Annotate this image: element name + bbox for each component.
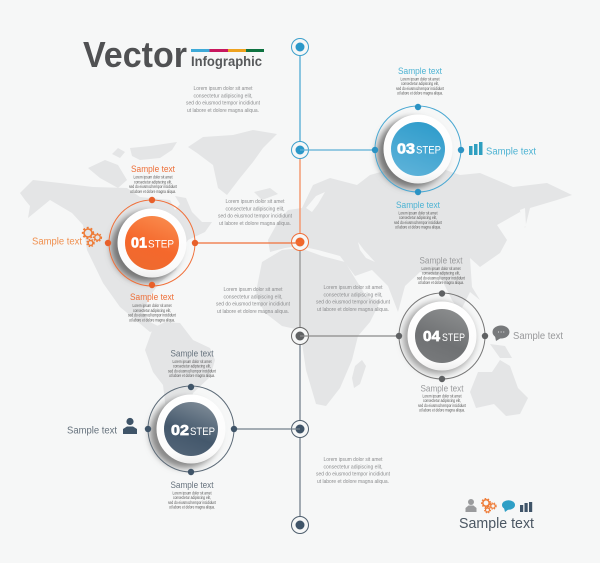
step 04: [300, 256, 563, 413]
bottom icon row: [459, 499, 534, 532]
step 02: [67, 348, 300, 510]
step 04 side label: Sample text: [513, 331, 563, 342]
step 01: [32, 164, 300, 322]
text block: middle left lower: ut labore et dolore magna aliqua.: [217, 309, 289, 315]
step 01 bottom label: [128, 292, 177, 322]
text block: top: [186, 86, 260, 114]
step 01 top label: sed do eiusmod tempor incididunt: [129, 184, 178, 189]
step 04 bottom label: Lorem ipsum dolor sit amet: [422, 394, 462, 398]
step 01 top label: Sample text: [131, 164, 175, 174]
icon: bar chart: [469, 142, 482, 155]
text block: middle left upper: [218, 199, 292, 227]
text block: top: sed do eiusmod tempor incididunt: [186, 101, 260, 107]
text block: middle left lower: consectetur adipiscing elit,: [224, 294, 283, 300]
text block: middle left upper: ut labore et dolore magna aliqua.: [219, 221, 291, 227]
step 03 bottom label: ut labore et dolore magna aliqua.: [395, 225, 441, 230]
text block: middle right: consectetur adipiscing elit,: [324, 292, 383, 298]
step 02 top label: Sample text: [170, 348, 214, 358]
step 03 top label: sed do eiusmod tempor incididunt: [396, 86, 445, 91]
step 03 bottom label: [394, 200, 443, 230]
text block: middle right: [316, 285, 390, 313]
step 02 side label: Sample text: [67, 426, 117, 436]
step 02 bottom label: sed do eiusmod tempor incididunt: [168, 500, 217, 505]
step 04 bottom label: Sample text: [420, 384, 464, 394]
step 04 top label: ut labore et dolore magna aliqua.: [418, 280, 464, 285]
icon: gears small: [482, 499, 496, 513]
step 04 top label: Lorem ipsum dolor sit amet: [422, 266, 461, 271]
step 02 top label: sed do eiusmod tempor incididunt: [168, 368, 217, 373]
step 04 top label: consectetur adipiscing elit,: [422, 271, 460, 276]
step 04 bottom label: sed do eiusmod tempor incididunt: [418, 403, 467, 408]
step 02 top label: Lorem ipsum dolor sit amet: [172, 359, 212, 364]
step 01 side label: Sample text: [32, 236, 82, 248]
text block: middle left lower: [216, 287, 290, 315]
step 02: STEP: [190, 426, 215, 438]
step 04: STEP: [442, 332, 465, 344]
step 04 top label: [417, 256, 466, 285]
vertical timeline: [299, 47, 301, 525]
step 01: STEP: [148, 238, 174, 250]
title: Infographic: [191, 54, 262, 69]
timeline nodes: [292, 38, 308, 534]
text block: middle left upper: Lorem ipsum dolor sit amet: [226, 199, 285, 205]
step 01 bottom label: consectetur adipiscing elit,: [133, 308, 171, 313]
title: Vector: [83, 34, 187, 75]
text block: middle right: ut labore et dolore magna aliqua.: [317, 307, 389, 313]
step 04 bottom label: [418, 384, 467, 413]
step 02 top label: consectetur adipiscing elit,: [173, 364, 211, 369]
step 04 bottom label: ut labore et dolore magna aliqua.: [419, 408, 465, 413]
step 04 top label: Sample text: [420, 256, 463, 266]
text block: bottom: consectetur adipiscing elit,: [324, 464, 383, 470]
step 02: 02: [171, 422, 189, 439]
step 02 top label: ut labore et dolore magna aliqua.: [169, 373, 215, 378]
step 04 top label: sed do eiusmod tempor incididunt: [417, 275, 466, 280]
step 03 bottom label: consectetur adipiscing elit,: [399, 215, 437, 220]
step 03: 03: [397, 140, 415, 158]
text block: bottom: Lorem ipsum dolor sit amet: [324, 457, 383, 463]
icon: person: [123, 418, 137, 434]
step 01 top label: [129, 164, 178, 194]
step 03 top label: Lorem ipsum dolor sit amet: [400, 76, 440, 82]
step 03 top label: Sample text: [398, 66, 442, 76]
icon: person small: [466, 499, 476, 512]
step 01: 01: [131, 234, 147, 252]
step 03 side label: Sample text: [486, 146, 536, 158]
step 04: 04: [423, 328, 441, 345]
text block: top: consectetur adipiscing elit,: [194, 93, 253, 99]
step 01 top label: Lorem ipsum dolor sit amet: [134, 174, 173, 180]
step 03 top label: consectetur adipiscing elit,: [401, 81, 439, 86]
text block: top: ut labore et dolore magna aliqua.: [187, 108, 259, 114]
icon: bar chart small: [520, 502, 532, 512]
text block: bottom: [316, 457, 390, 485]
icon: speech bubble: [492, 326, 510, 341]
step 01 top label: ut labore et dolore magna aliqua.: [130, 189, 176, 194]
text block: bottom: sed do eiusmod tempor incididunt: [316, 472, 390, 478]
step 01 top label: consectetur adipiscing elit,: [134, 179, 172, 184]
text block: middle right: sed do eiusmod tempor incididunt: [316, 300, 390, 306]
title: [83, 34, 264, 75]
step 01 bottom label: ut labore et dolore magna aliqua.: [129, 317, 175, 322]
step 01 bottom label: Sample text: [130, 292, 174, 302]
text block: middle left upper: sed do eiusmod tempor incididunt: [218, 214, 292, 220]
step 04 bottom label: consectetur adipiscing elit,: [423, 398, 461, 403]
text block: top: Lorem ipsum dolor sit amet: [194, 86, 253, 92]
step 03 bottom label: sed do eiusmod tempor incididunt: [394, 220, 443, 225]
icon: speech bubble small: [502, 500, 515, 512]
step 02 bottom label: consectetur adipiscing elit,: [173, 495, 211, 500]
step 01 bottom label: sed do eiusmod tempor incididunt: [128, 312, 177, 318]
text block: middle right: Lorem ipsum dolor sit amet: [324, 285, 383, 291]
text block: middle left lower: sed do eiusmod tempor incididunt: [216, 302, 290, 308]
step 02 bottom label: [168, 480, 217, 510]
text block: bottom: ut labore et dolore magna aliqua.: [317, 479, 389, 485]
step 03: STEP: [416, 144, 441, 156]
step 03 top label: ut labore et dolore magna aliqua.: [397, 91, 443, 96]
step 01 bottom label: Lorem ipsum dolor sit amet: [132, 303, 172, 308]
world map: [20, 130, 572, 445]
step 03 bottom label: Sample text: [396, 200, 440, 210]
bottom sample text: Sample text: [459, 516, 534, 532]
text block: middle left lower: Lorem ipsum dolor sit amet: [224, 287, 283, 293]
step 03 top label: [396, 66, 445, 96]
step 03: [300, 66, 536, 230]
step 02 bottom label: Lorem ipsum dolor sit amet: [172, 490, 212, 496]
step 02 top label: [168, 348, 217, 378]
step 02 bottom label: ut labore et dolore magna aliqua.: [169, 505, 215, 510]
step 02 bottom label: Sample text: [170, 480, 214, 490]
step 03 bottom label: Lorem ipsum dolor sit amet: [398, 210, 438, 216]
icon: gears: [83, 228, 102, 247]
text block: middle left upper: consectetur adipiscing elit,: [226, 206, 285, 212]
